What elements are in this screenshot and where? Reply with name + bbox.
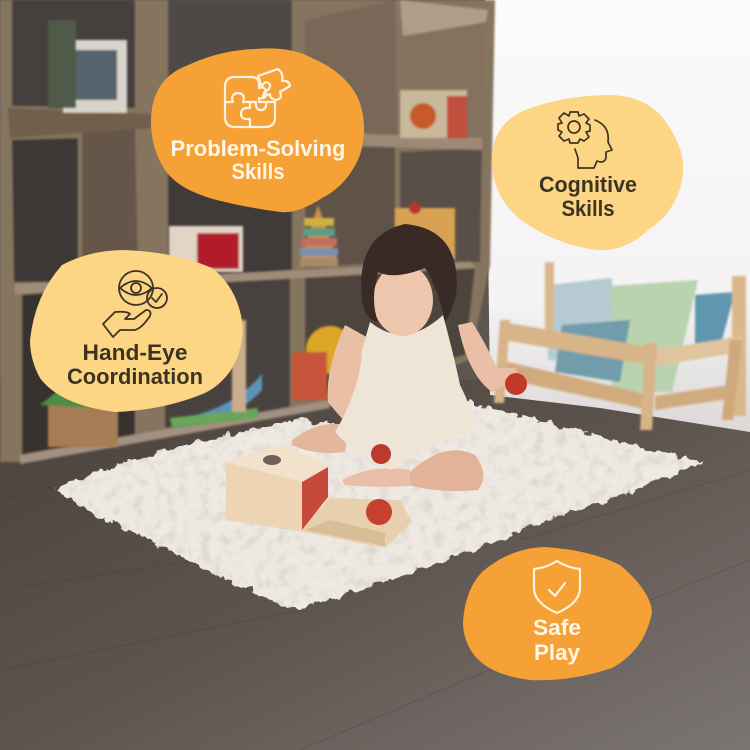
heading line 2: Skills	[562, 196, 614, 221]
floor planks	[0, 470, 750, 750]
balance board	[172, 374, 262, 428]
wooden house	[48, 405, 118, 447]
face	[373, 264, 433, 336]
book rack	[494, 262, 746, 430]
yellow wooden toy	[395, 208, 455, 260]
panel: hand-eye coordination	[30, 250, 243, 412]
shelf boards	[8, 108, 152, 138]
arms	[328, 325, 392, 452]
dress	[335, 315, 472, 470]
toy in girl's right hand	[505, 373, 527, 395]
legs	[292, 424, 350, 453]
girl	[292, 224, 520, 491]
colored block book	[400, 90, 467, 138]
shag rug	[55, 402, 704, 610]
toy in girl's left hand	[371, 444, 391, 464]
icon: head with gear	[558, 112, 612, 168]
heading: Problem-Solving	[170, 136, 346, 161]
heading: Hand-Eye	[82, 340, 188, 365]
heading line 2: Play	[534, 640, 580, 665]
white picture frame	[63, 40, 127, 113]
heading line 2: Skills	[232, 159, 284, 184]
shelf toys	[40, 20, 467, 447]
icon: hand and eye	[103, 271, 167, 337]
window and curtain	[485, 0, 750, 432]
heading: Cognitive	[539, 172, 637, 197]
panel: cognitive skills	[492, 95, 683, 250]
icon: puzzle	[225, 69, 290, 127]
heading: Safe	[533, 615, 581, 640]
panel: safe play	[463, 547, 652, 680]
shelving unit	[0, 0, 495, 464]
floor	[0, 380, 750, 750]
wooden coin box	[225, 445, 412, 548]
yellow ball and truck	[306, 326, 354, 374]
icon: shield check	[534, 561, 580, 613]
heading line 2: Coordination	[67, 364, 203, 389]
stacking rings	[300, 205, 338, 262]
panel: problem-solving skills	[151, 48, 364, 212]
hair	[361, 224, 457, 322]
red drawer box	[169, 226, 243, 272]
